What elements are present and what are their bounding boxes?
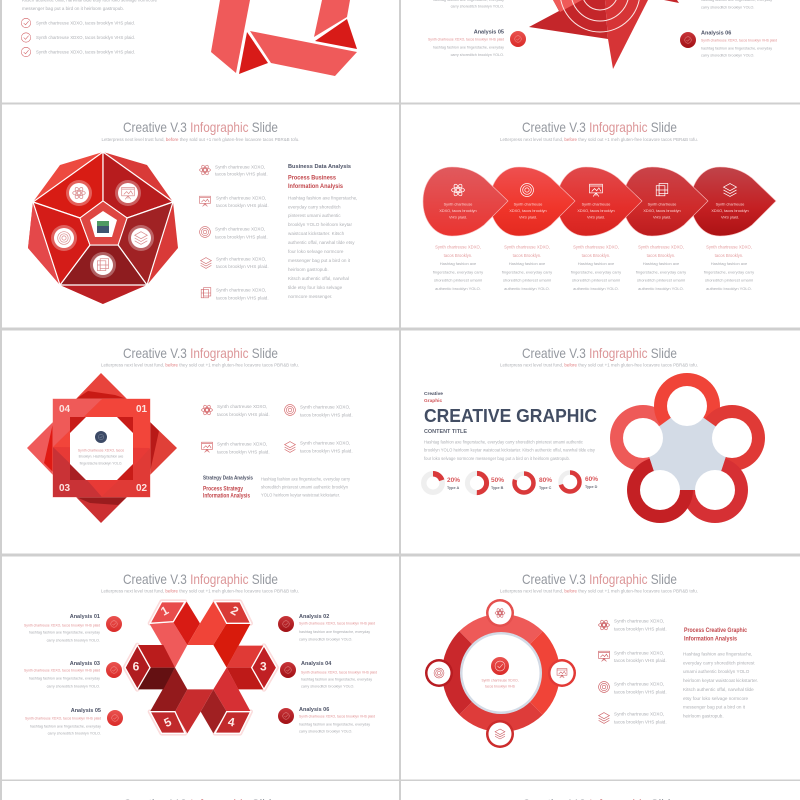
process body bbox=[683, 652, 758, 718]
teardrop row bbox=[423, 167, 776, 236]
teardrop labels: XDXO, tacos brooklyn bbox=[643, 209, 681, 213]
donut 20%: Type A bbox=[447, 486, 459, 490]
teardrop labels: Synth chartreuse bbox=[648, 202, 676, 206]
analysis 06: hashtag fashion axe fingerstache, everyday bbox=[299, 722, 370, 726]
column text 1: authentic brooklyn YOLO. bbox=[435, 286, 481, 291]
icon list: Synth chartreuse XDXO, bbox=[300, 440, 350, 446]
icon list: Synth chartreuse XDXO, bbox=[217, 404, 267, 409]
strategy heading: Strategy Data Analysis bbox=[203, 476, 253, 482]
icon list: Synth chartreuse XDXO, bbox=[614, 618, 664, 624]
content title: CONTENT TITLE bbox=[424, 429, 468, 435]
body text: Hashtag fashion axe fingerstache, everyday carry shoreditch pinterest umami authentic bbox=[424, 440, 584, 444]
teardrop labels: XDXO, tacos brooklyn bbox=[439, 209, 477, 213]
column text 5 bbox=[704, 244, 754, 291]
strategy heading bbox=[203, 476, 253, 500]
analysis 05: Analysis 05 bbox=[474, 30, 504, 36]
analysis 03: Analysis 03 bbox=[70, 661, 100, 667]
column text 4: tacos Brooklyn. bbox=[647, 253, 675, 258]
slide: strategy frame bbox=[2, 330, 399, 554]
checklist intro text: messenger bag put a bird on it heirloom gastropub. bbox=[22, 6, 124, 11]
star target graphic bbox=[529, 0, 679, 69]
title: Creative V.3 Infographic Slide bbox=[522, 571, 677, 587]
teardrop labels: VHS plaid. bbox=[653, 216, 671, 220]
teardrop labels: VHS plaid. bbox=[721, 216, 739, 220]
top node bbox=[486, 599, 514, 627]
icon list: Synth chartreuse XDXO, bbox=[300, 404, 350, 410]
center icon and caption: Synth chartreuse XDXO, tacos bbox=[78, 448, 124, 452]
hexagon star graphic: 5 bbox=[162, 714, 174, 730]
hexagon star graphic: 4 bbox=[227, 715, 236, 730]
analysis 01: hashtag fashion axe fingerstache, everyday bbox=[29, 630, 100, 634]
analysis 03: Synth chartreuse XDXO, tacos brooklyn VHS plaid bbox=[24, 668, 100, 672]
ribbon graphic bbox=[211, 0, 357, 76]
hexagon star graphic: 1 bbox=[158, 603, 171, 619]
analysis 06: Synth chartreuse XDXO, tacos brooklyn VHS plaid bbox=[299, 714, 375, 718]
slide: teardrop process bbox=[401, 104, 800, 328]
left residual text: carry shoreditch brooklyn YOLO. bbox=[451, 4, 504, 8]
teardrop labels: VHS plaid. bbox=[449, 216, 467, 220]
column text 5: fingerstache, everyday carry bbox=[704, 270, 754, 274]
icon list: Synth chartreuse XDXO, bbox=[217, 442, 267, 446]
analysis 04: hashtag fashion axe fingerstache, everyday bbox=[301, 678, 372, 682]
left residual text bbox=[433, 0, 504, 8]
teardrop labels bbox=[439, 202, 749, 220]
column text 3: authentic brooklyn YOLO. bbox=[573, 286, 619, 291]
analysis body: normcore messenger. bbox=[288, 294, 332, 299]
body text: four loko selvage normcore messenger bag put a bird on it heirloom gastropub. bbox=[424, 456, 570, 461]
column text 3: fingerstache, everyday carry bbox=[571, 270, 621, 274]
analysis heading: Process Business bbox=[288, 176, 337, 182]
analysis body: tilde etsy four loko selvage bbox=[288, 285, 343, 290]
right node bbox=[548, 659, 576, 687]
analysis 06: hashtag fashion axe fingerstache, everyday bbox=[701, 46, 772, 50]
column text 3: Hashtag fashion axe bbox=[578, 261, 615, 266]
icon list: tacos brooklyn VHS plaid. bbox=[215, 172, 268, 176]
slide: star target infographic bbox=[401, 0, 800, 102]
slide: partial bottom left bbox=[2, 781, 399, 800]
analysis 03 bbox=[24, 661, 122, 688]
node icons bbox=[51, 180, 154, 278]
process heading: Information Analysis bbox=[684, 636, 738, 642]
analysis heading: Information Analysis bbox=[288, 184, 344, 190]
subtitle: Letterpress next level trust fund, before they sold out +1 meh gluten-free locavore tacos PBR&B tofu. bbox=[500, 362, 698, 368]
analysis 06: carry shoreditch brooklyn YOLO. bbox=[701, 54, 754, 58]
strategy heading: Information Analysis bbox=[203, 494, 251, 500]
teardrop labels: Synth chartreuse bbox=[582, 202, 610, 206]
analysis 04: Synth chartreuse XDXO, tacos brooklyn VHS plaid bbox=[301, 670, 377, 674]
donut 60%: 60% bbox=[585, 476, 598, 483]
column text 4: Hashtag fashion axe bbox=[643, 261, 680, 266]
donut 60% bbox=[560, 472, 598, 492]
analysis 02: carry shoreditch brooklyn YOLO. bbox=[299, 638, 352, 642]
column text 4: Synth chartreuse XDXO, bbox=[638, 244, 684, 250]
process body: Kitsch authentic offal, narwhal tilde bbox=[683, 687, 754, 692]
hexagon star graphic: 6 bbox=[133, 659, 140, 673]
donut 80% bbox=[514, 474, 552, 492]
icon list: Synth chartreuse XDXO, bbox=[216, 196, 266, 200]
icon list: tacos brooklyn VHS plaid. bbox=[614, 720, 667, 724]
donut 80%: 80% bbox=[539, 477, 552, 484]
title: Creative V.3 Infographic Slide bbox=[522, 345, 677, 361]
analysis 03: hashtag fashion axe fingerstache, everyday bbox=[29, 676, 100, 680]
analysis 05: Synth chartreuse XDXO, tacos brooklyn VHS plaid bbox=[25, 716, 101, 720]
small heading: Graphic bbox=[424, 398, 442, 404]
body text: brooklyn YOLO heirloom keytar waistcoat kickstarter. Kitsch authentic offal, narwhal tilde etsy bbox=[424, 448, 596, 452]
hexagon star graphic bbox=[125, 602, 277, 733]
slide: hexagon six-step analysis bbox=[2, 556, 399, 780]
donut 20%: 20% bbox=[447, 477, 460, 484]
small heading: Creative bbox=[424, 391, 443, 397]
subtitle: Letterpress next level trust fund, before they sold out +1 meh gluten-free locavore tacos PBR&B tofu. bbox=[500, 137, 698, 142]
analysis 05: carry shoreditch brooklyn YOLO. bbox=[451, 53, 504, 57]
icon list: tacos brooklyn VHS plaid. bbox=[216, 203, 269, 208]
center badge: tacos brooklyn VHS bbox=[485, 684, 516, 688]
icon list bbox=[200, 164, 269, 300]
analysis 02 bbox=[278, 614, 375, 642]
right residual text bbox=[701, 0, 772, 10]
slide: ring process bbox=[401, 556, 800, 780]
icon list: Synth chartreuse XDXO, bbox=[216, 256, 266, 262]
checklist: Synth chartreuse XDXO, tacos brooklyn VHS plaid. bbox=[36, 35, 135, 40]
frame numbers: 04 bbox=[59, 404, 71, 415]
analysis body: everyday carry shoreditch bbox=[288, 204, 341, 210]
analysis 04: carry shoreditch brooklyn YOLO. bbox=[301, 684, 354, 688]
column text 2: tacos Brooklyn. bbox=[513, 253, 541, 258]
analysis 06 bbox=[278, 707, 375, 734]
center icon and caption: Brooklyn. Hashtag fashion axe bbox=[79, 454, 124, 458]
analysis body: authentic offal, narwhal tilde etsy bbox=[288, 240, 355, 245]
strategy body: Hashtag fashion axe fingerstache, everyday carry bbox=[261, 476, 351, 482]
teardrop labels: XDXO, tacos brooklyn bbox=[509, 209, 547, 213]
column text 4: shoreditch pinterest umami bbox=[637, 278, 685, 282]
checklist bbox=[21, 18, 135, 57]
right residual text: carry shoreditch brooklyn YOLO. bbox=[701, 6, 754, 10]
process body: messenger bag put a bird on it bbox=[683, 704, 746, 710]
strategy body: shoreditch pinterest umami authentic brooklyn bbox=[261, 484, 348, 490]
icon list: tacos brooklyn VHS plaid. bbox=[217, 412, 270, 417]
column text 2: shoreditch pinterest umami bbox=[503, 278, 551, 282]
analysis 05: carry shoreditch brooklyn YOLO. bbox=[48, 732, 101, 736]
column text 4: authentic brooklyn YOLO. bbox=[638, 286, 684, 291]
analysis 06: Synth chartreuse XDXO, tacos brooklyn VHS plaid bbox=[701, 38, 777, 42]
process body: umami authentic brooklyn YOLO bbox=[683, 669, 750, 674]
analysis body: brooklyn YOLO heirloom keytar bbox=[288, 222, 352, 227]
bottom node bbox=[486, 720, 514, 748]
subtitle: Letterpress next level trust fund, before they sold out +1 meh gluten-free locavore tacos PBR&B tofu. bbox=[102, 137, 300, 142]
left node bbox=[425, 659, 453, 687]
subtitle: Letterpress next level trust fund, before they sold out +1 meh gluten-free locavore tacos PBR&B tofu. bbox=[101, 588, 299, 594]
icon list: Synth chartreuse XDXO, bbox=[614, 682, 664, 686]
column text 4 bbox=[636, 244, 686, 291]
icon list: tacos brooklyn VHS plaid. bbox=[216, 264, 269, 269]
slide: partial bottom right bbox=[401, 781, 800, 800]
analysis 05: hashtag fashion axe fingerstache, everyday bbox=[433, 46, 504, 50]
analysis body: Hashtag fashion axe fingerstache, bbox=[288, 196, 357, 200]
column text 2: fingerstache, everyday carry bbox=[502, 270, 552, 274]
icon list: tacos brooklyn VHS plaid. bbox=[614, 658, 667, 663]
polygon diagram bbox=[28, 152, 178, 304]
five petal flower bbox=[610, 373, 765, 523]
analysis 06: Analysis 06 bbox=[701, 30, 731, 36]
column text 2: Hashtag fashion axe bbox=[509, 261, 546, 266]
process heading: Process Creative Graphic bbox=[684, 628, 748, 634]
analysis 05: Synth chartreuse XDXO, tacos brooklyn VHS plaid bbox=[428, 38, 504, 42]
slide: ribbon infographic with checklist bbox=[2, 0, 399, 102]
column text 2: Synth chartreuse XDXO, bbox=[504, 244, 550, 250]
analysis 03: carry shoreditch brooklyn YOLO. bbox=[47, 684, 100, 688]
icon list: Synth chartreuse XDXO, bbox=[614, 712, 664, 716]
column text 5: Hashtag fashion axe bbox=[711, 261, 748, 266]
analysis 02: Analysis 02 bbox=[299, 614, 329, 620]
small heading bbox=[424, 391, 443, 404]
icon list: Synth chartreuse XDXO, bbox=[614, 650, 664, 656]
analysis body: pinterest umami authentic bbox=[288, 213, 341, 218]
teardrop labels: Synth chartreuse bbox=[514, 202, 542, 206]
analysis 02: Synth chartreuse XDXO, tacos brooklyn VHS plaid bbox=[299, 622, 375, 626]
icon list: Synth chartreuse XDXO, bbox=[215, 164, 265, 170]
column text 5: authentic brooklyn YOLO. bbox=[706, 286, 752, 291]
column text 3: Synth chartreuse XDXO, bbox=[573, 244, 619, 250]
ring diagram bbox=[425, 599, 576, 748]
analysis body: messenger bag put a bird on it bbox=[288, 258, 351, 263]
teardrop labels: XDXO, tacos brooklyn bbox=[711, 209, 749, 213]
column text 3: shoreditch pinterest umami bbox=[572, 278, 620, 282]
analysis body bbox=[288, 196, 357, 299]
title: Creative V.3 Infographic Slide bbox=[123, 571, 278, 587]
process body: heirloom gastropub. bbox=[683, 714, 724, 718]
process body: etsy four loko selvage normcore bbox=[683, 696, 749, 701]
column text 1: shoreditch pinterest umami bbox=[434, 278, 482, 282]
subtitle: Letterpress next level trust fund, before they sold out +1 meh gluten-free locavore tacos PBR&B tofu. bbox=[500, 588, 698, 594]
column text 1 bbox=[433, 244, 483, 291]
donut 60%: Type D bbox=[585, 485, 598, 489]
center icon bbox=[97, 221, 109, 233]
checklist: Synth chartreuse XDXO, tacos brooklyn VHS plaid. bbox=[36, 20, 135, 26]
slide: polygon business analysis bbox=[2, 104, 399, 328]
icon list: Synth chartreuse XDXO, bbox=[215, 226, 265, 232]
process heading bbox=[684, 628, 748, 642]
column text 1: fingerstache, everyday carry bbox=[433, 270, 483, 274]
teardrop labels: Synth chartreuse bbox=[716, 202, 744, 206]
title: Creative V.3 Infographic Slide bbox=[123, 345, 278, 361]
column text 3 bbox=[571, 244, 621, 291]
analysis body: four loko selvage normcore bbox=[288, 249, 344, 254]
strategy heading: Process Strategy bbox=[203, 486, 244, 492]
donut 50%: 50% bbox=[491, 477, 504, 484]
analysis 01 bbox=[24, 614, 122, 642]
column text 1: Hashtag fashion axe bbox=[440, 261, 477, 266]
donut 20% bbox=[424, 474, 460, 492]
icon list: tacos brooklyn VHS plaid. bbox=[216, 296, 269, 300]
frame numbers: 02 bbox=[136, 483, 148, 494]
analysis 01: carry shoreditch brooklyn YOLO. bbox=[47, 638, 100, 642]
column text 5: Synth chartreuse XDXO, bbox=[706, 244, 752, 250]
title: Creative V.3 Infographic Slide bbox=[522, 119, 677, 135]
column text 2: authentic brooklyn YOLO. bbox=[504, 286, 550, 291]
analysis 05: hashtag fashion axe fingerstache, everyday bbox=[30, 724, 101, 728]
process body: heirloom keytar waistcoat kickstarter. bbox=[683, 678, 758, 683]
strategy body: YOLO heirloom keytar waistcoat kickstarter. bbox=[261, 492, 340, 498]
hexagon star graphic: 2 bbox=[228, 603, 241, 619]
center badge bbox=[481, 657, 519, 688]
icon list: Synth chartreuse XDXO, bbox=[216, 288, 266, 292]
analysis 05: Analysis 05 bbox=[71, 708, 101, 714]
body text bbox=[424, 440, 596, 461]
donut 80%: Type C bbox=[539, 486, 552, 490]
strategy body bbox=[261, 476, 351, 498]
icon list bbox=[599, 618, 667, 724]
teardrop labels: VHS plaid. bbox=[587, 216, 605, 220]
process body: everyday carry shoreditch pinterest bbox=[683, 660, 755, 666]
slide: creative graphic flower bbox=[401, 330, 800, 554]
analysis heading bbox=[288, 164, 351, 190]
donut 50% bbox=[467, 473, 504, 493]
frame numbers bbox=[59, 404, 148, 494]
checklist: Synth chartreuse XDXO, tacos brooklyn VHS plaid. bbox=[36, 50, 135, 54]
analysis 05 bbox=[25, 708, 123, 736]
column text 1: Synth chartreuse XDXO, bbox=[435, 244, 481, 250]
teardrop icons bbox=[452, 183, 736, 197]
column text 4: fingerstache, everyday carry bbox=[636, 270, 686, 274]
column text 1: tacos Brooklyn. bbox=[444, 253, 472, 258]
checklist intro text bbox=[22, 0, 157, 11]
rotated square frame graphic bbox=[27, 373, 177, 523]
process body: Hashtag fashion axe fingerstache, bbox=[683, 652, 752, 656]
analysis 05 bbox=[428, 30, 526, 57]
analysis body: waistcoat kickstarter. Kitsch bbox=[288, 231, 345, 236]
frame numbers: 03 bbox=[59, 483, 71, 494]
column text 5: shoreditch pinterest umami bbox=[705, 278, 753, 282]
analysis 01: Synth chartreuse XDXO, tacos brooklyn VHS plaid bbox=[24, 624, 100, 628]
title: Creative V.3 Infographic Slide bbox=[123, 119, 278, 135]
analysis 04 bbox=[280, 661, 377, 688]
icon list: tacos brooklyn VHS plaid. bbox=[215, 234, 268, 240]
center icon and caption bbox=[78, 431, 124, 466]
analysis 04: Analysis 04 bbox=[301, 661, 332, 667]
analysis 02: hashtag fashion axe fingerstache, everyday bbox=[299, 630, 370, 634]
analysis body: Kitsch authentic offal, narwhal bbox=[288, 276, 349, 281]
donut 50%: Type B bbox=[491, 486, 504, 490]
column text 5: tacos Brooklyn. bbox=[715, 253, 743, 258]
icon list: tacos brooklyn VHS plaid. bbox=[614, 626, 667, 632]
analysis 06: Analysis 06 bbox=[299, 707, 329, 713]
icon list: tacos brooklyn VHS plaid. bbox=[300, 412, 353, 418]
icon list bbox=[202, 404, 353, 454]
hexagon star graphic: 3 bbox=[260, 659, 267, 673]
center icon and caption: fingerstache Brooklyn YOLO. bbox=[80, 462, 122, 466]
column text 3: tacos Brooklyn. bbox=[582, 253, 610, 258]
center badge: Synth chartreuse XDXO, bbox=[481, 678, 519, 682]
analysis body: heirloom gastropub. bbox=[288, 267, 329, 272]
icon list: tacos brooklyn VHS plaid. bbox=[614, 690, 667, 694]
subtitle: Letterpress next level trust fund, before they sold out +1 meh gluten-free locavore tacos PBR&B tofu. bbox=[101, 362, 299, 368]
analysis 01: Analysis 01 bbox=[70, 614, 100, 620]
teardrop labels: XDXO, tacos brooklyn bbox=[577, 209, 615, 213]
teardrop labels: VHS plaid. bbox=[519, 216, 537, 220]
frame numbers: 01 bbox=[136, 404, 148, 415]
analysis heading: Business Data Analysis bbox=[288, 164, 351, 170]
icon list: tacos brooklyn VHS plaid. bbox=[300, 448, 353, 454]
icon list: tacos brooklyn VHS plaid. bbox=[217, 450, 270, 454]
big heading: CREATIVE GRAPHIC bbox=[424, 406, 597, 426]
column text 2 bbox=[502, 244, 552, 291]
teardrop labels: Synth chartreuse bbox=[444, 202, 472, 206]
analysis 06 bbox=[680, 30, 777, 58]
analysis 06: carry shoreditch brooklyn YOLO. bbox=[299, 730, 352, 734]
